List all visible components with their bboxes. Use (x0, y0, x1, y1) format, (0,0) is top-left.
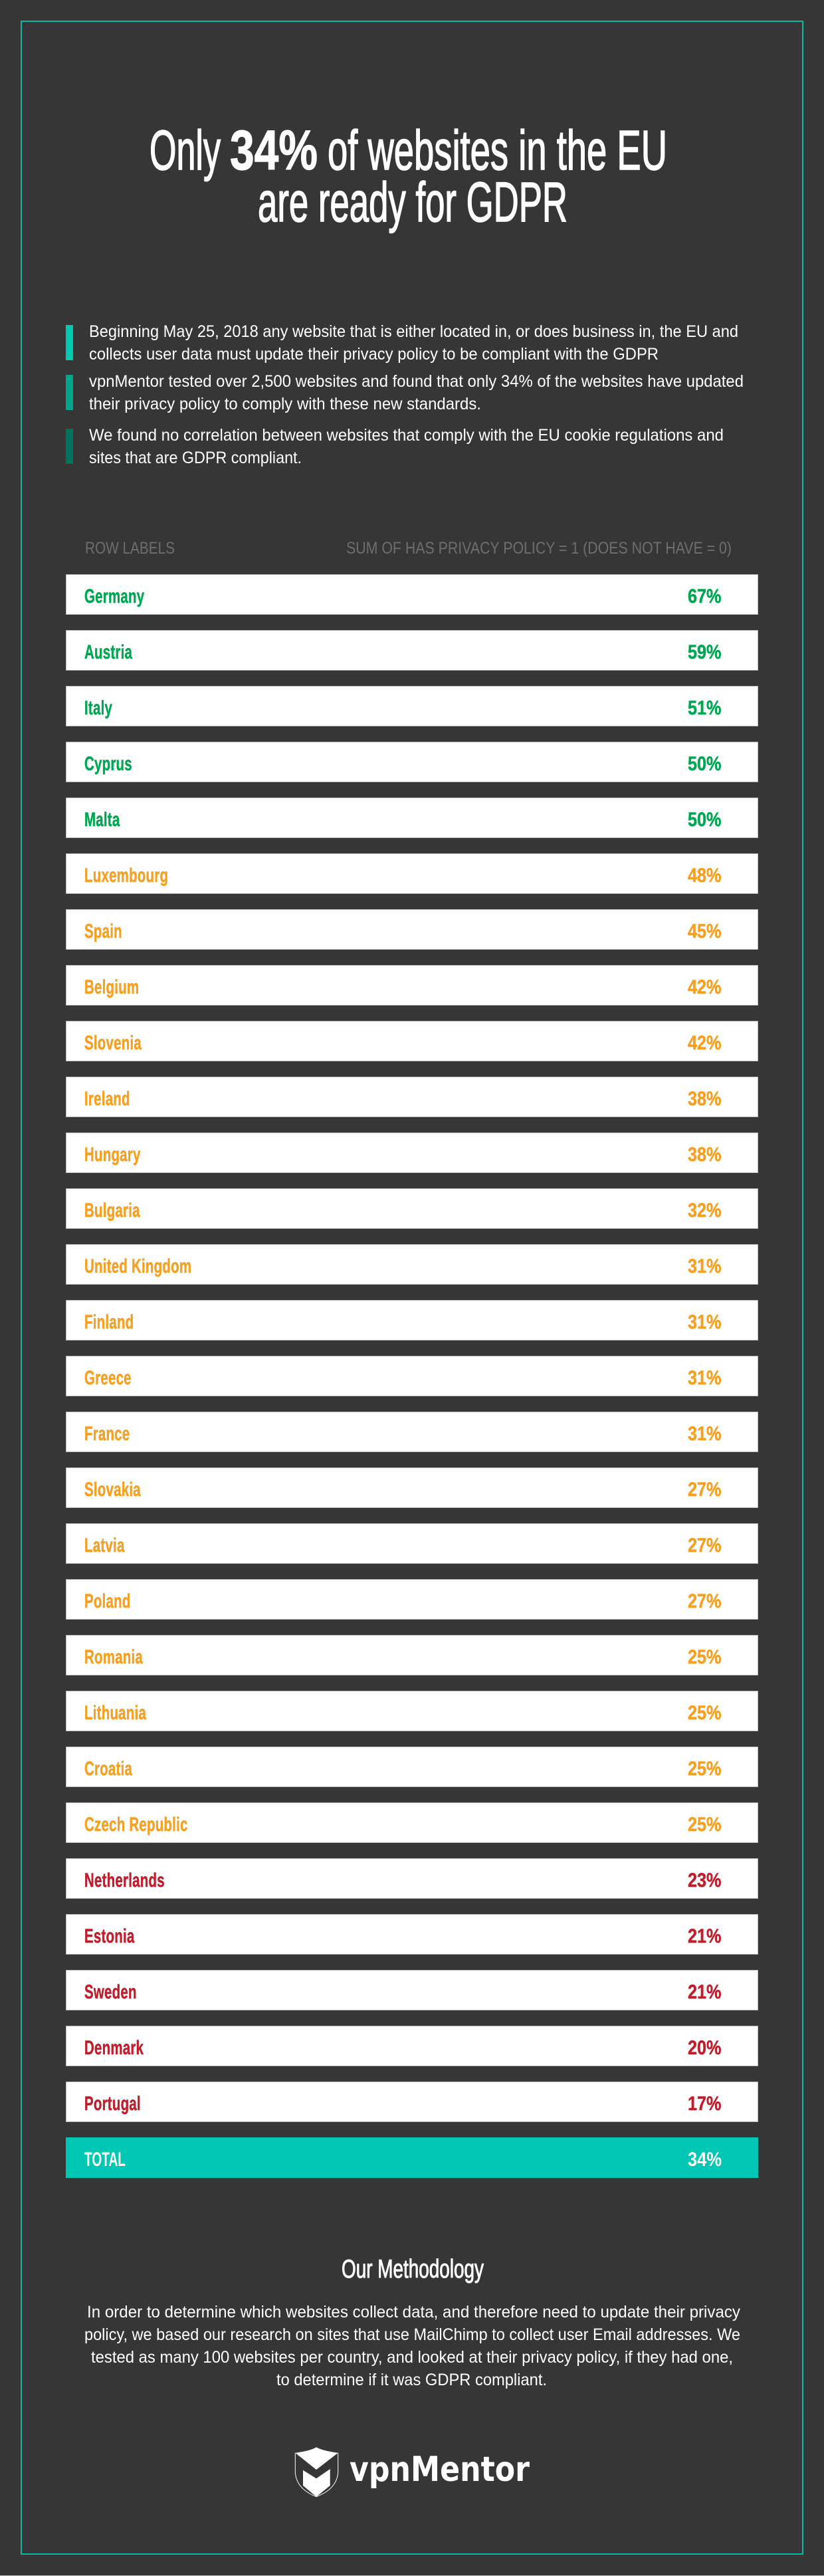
row: Spain: Spain (84, 920, 122, 942)
row: Czech Republic: Czech Republic (84, 1814, 188, 1836)
row: United Kingdom (66, 1244, 758, 1284)
row: Sweden (66, 1970, 758, 2010)
row: Belgium: Belgium (84, 976, 139, 998)
row: Cyprus (66, 742, 758, 782)
text block: test results (66, 372, 744, 413)
row: Croatia (66, 1747, 758, 1786)
table of countries (66, 574, 758, 2178)
text block: methodology: In order to determine which websites collect data, and therefore need to update their privacy (87, 2303, 740, 2321)
row: Finland: 31% (688, 1311, 721, 1333)
row: Poland: Poland (84, 1590, 131, 1612)
row: Bulgaria: 32% (688, 1199, 721, 1221)
row: Austria (66, 630, 758, 670)
row: Malta: Malta (84, 809, 120, 831)
row: Slovakia (66, 1467, 758, 1507)
logo: vpnMentor: vpnMentor (350, 2450, 530, 2490)
row: Cyprus: 50% (688, 752, 721, 774)
row: Poland: 27% (688, 1590, 721, 1612)
title: 34% (230, 119, 318, 181)
icon: shield (295, 2447, 338, 2497)
text block: cookie correlation: We found no correlation between websites that comply with the EU cookie regulations and (89, 426, 724, 445)
row: Portugal: Portugal (84, 2093, 141, 2115)
row: Netherlands (66, 1858, 758, 1898)
title: Only (150, 119, 221, 181)
row: Estonia: 21% (688, 1925, 721, 1947)
row: Denmark: Denmark (84, 2037, 144, 2059)
row: Germany: 67% (688, 585, 721, 607)
row: Ireland: 38% (688, 1087, 721, 1109)
row: Italy: 51% (688, 697, 721, 718)
row: Hungary: 38% (688, 1143, 721, 1165)
row: Cyprus: Cyprus (84, 753, 132, 775)
row: Luxembourg: Luxembourg (84, 865, 168, 887)
row: Belgium (66, 965, 758, 1005)
row: Lithuania: 25% (688, 1701, 721, 1723)
row: Netherlands: 23% (688, 1869, 721, 1891)
text block: GDPR deadline (66, 322, 738, 364)
text block: methodology: to determine if it was GDPR compliant. (276, 2371, 547, 2389)
row: Bulgaria: Bulgaria (84, 1200, 140, 1222)
text block: methodology: policy, we based our research on sites that use MailChimp to collect user Email addresses. We (84, 2325, 740, 2344)
row: Malta: 50% (688, 808, 721, 830)
row: total: TOTAL (84, 2149, 126, 2171)
row: Belgium: 42% (688, 976, 721, 998)
row: Italy: Italy (84, 697, 112, 719)
table header (85, 539, 732, 558)
row: Croatia: Croatia (84, 1758, 132, 1780)
row: Italy (66, 686, 758, 726)
row: Slovenia (66, 1021, 758, 1061)
title: are ready for GDPR (258, 171, 567, 233)
text block: methodology (84, 2303, 740, 2389)
row: total (66, 2137, 758, 2178)
row: Bulgaria (66, 1188, 758, 1228)
row: Germany (66, 574, 758, 614)
row: France: France (84, 1423, 130, 1445)
row: Czech Republic: 25% (688, 1813, 721, 1835)
text block: test results: their privacy policy to comply with these new standards. (89, 395, 481, 413)
row: United Kingdom: United Kingdom (84, 1255, 191, 1277)
row: Hungary: Hungary (84, 1144, 141, 1166)
row: Luxembourg (66, 853, 758, 893)
row: Slovenia: 42% (688, 1031, 721, 1053)
row: Finland (66, 1300, 758, 1340)
logo: vpnMentor (295, 2447, 530, 2497)
row: Spain (66, 909, 758, 949)
text block: GDPR deadline: Beginning May 25, 2018 any website that is either located in, or does business in, the EU and (89, 322, 738, 341)
row: Greece: 31% (688, 1366, 721, 1388)
row: Romania (66, 1635, 758, 1675)
row: United Kingdom: 31% (688, 1255, 721, 1277)
row: Estonia (66, 1914, 758, 1954)
row: France (66, 1412, 758, 1451)
row: France: 31% (688, 1422, 721, 1444)
row: Poland (66, 1579, 758, 1619)
row: Portugal: 17% (688, 2092, 721, 2114)
row: Greece (66, 1356, 758, 1396)
row: Portugal (66, 2082, 758, 2121)
row: Sweden: 21% (688, 1981, 721, 2002)
row: Ireland: Ireland (84, 1088, 130, 1110)
row: Netherlands: Netherlands (84, 1870, 165, 1891)
row: Austria: 59% (688, 641, 721, 663)
table header: SUM OF HAS PRIVACY POLICY = 1 (DOES NOT HAVE = 0) (346, 539, 732, 558)
row: Denmark (66, 2026, 758, 2066)
row: Estonia: Estonia (84, 1925, 135, 1947)
table header: ROW LABELS (85, 539, 175, 558)
text block: GDPR deadline: collects user data must update their privacy policy to be compliant with the GDPR (89, 345, 659, 364)
text block: test results: vpnMentor tested over 2,500 websites and found that only 34% of the websites have updated (89, 372, 744, 391)
row: Czech Republic (66, 1802, 758, 1842)
row: Latvia: 27% (688, 1534, 721, 1556)
row: Latvia: Latvia (84, 1535, 125, 1556)
row: Romania: Romania (84, 1646, 143, 1668)
text block: cookie correlation (66, 426, 724, 467)
row: Hungary (66, 1132, 758, 1172)
row: Latvia (66, 1523, 758, 1563)
row: Slovakia: Slovakia (84, 1479, 141, 1501)
row: Lithuania: Lithuania (84, 1702, 146, 1724)
text block: cookie correlation: sites that are GDPR compliant. (89, 449, 302, 467)
row: total: 34% (688, 2149, 722, 2171)
row: Sweden: Sweden (84, 1981, 137, 2003)
heading: our methodology: Our Methodology (342, 2255, 484, 2284)
row: Slovenia: Slovenia (84, 1032, 142, 1054)
row: Lithuania (66, 1691, 758, 1731)
row: Finland: Finland (84, 1311, 134, 1333)
row: Germany: Germany (84, 586, 145, 607)
text block: methodology: tested as many 100 websites per country, and looked at their privacy policy, if they had one, (91, 2348, 733, 2367)
row: Malta (66, 798, 758, 837)
row: Croatia: 25% (688, 1757, 721, 1779)
row: Spain: 45% (688, 920, 721, 942)
row: Ireland (66, 1077, 758, 1117)
row: Romania: 25% (688, 1646, 721, 1667)
row: Greece: Greece (84, 1367, 132, 1389)
row: Denmark: 20% (688, 2036, 721, 2058)
title (150, 119, 667, 233)
row: Austria: Austria (84, 641, 132, 663)
row: Luxembourg: 48% (688, 864, 721, 886)
row: Slovakia: 27% (688, 1478, 721, 1500)
